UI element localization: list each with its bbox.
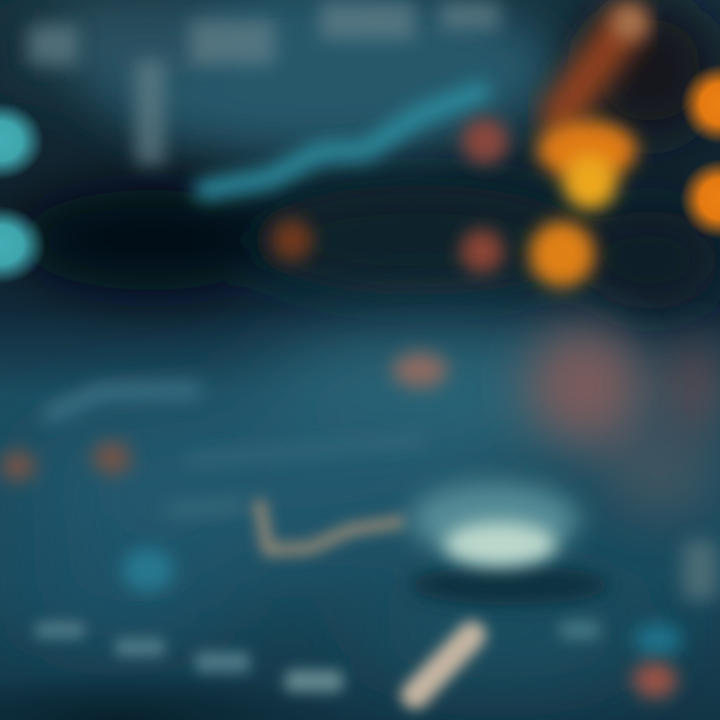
upper chart panel	[2, 0, 560, 155]
chart line	[205, 92, 480, 190]
small orange marks	[0, 441, 132, 482]
blue dot	[634, 623, 682, 657]
orange flare	[537, 120, 637, 210]
pink reflection	[527, 327, 719, 515]
lower table surface	[5, 330, 650, 680]
red dot	[633, 662, 677, 698]
glowing disc	[444, 522, 556, 566]
top tan light	[612, 4, 648, 40]
teal smudge	[122, 548, 174, 592]
bottom left shadow	[0, 650, 340, 720]
glowing disc halo	[410, 482, 580, 558]
lower chart streaks	[50, 390, 420, 510]
red lights	[271, 118, 508, 273]
right orange lights	[640, 64, 720, 239]
lower orange light	[529, 221, 595, 287]
lower text marks	[35, 620, 600, 692]
disc shadow	[410, 565, 610, 605]
tan squiggle line	[260, 505, 400, 550]
dark horizon band	[20, 0, 720, 310]
diagonal tan bar	[415, 635, 472, 695]
upper chart labels	[28, 2, 500, 165]
left teal lights	[0, 102, 92, 284]
right grey block	[682, 540, 718, 600]
orange streak	[560, 25, 625, 115]
pink reflection dot	[392, 352, 448, 388]
